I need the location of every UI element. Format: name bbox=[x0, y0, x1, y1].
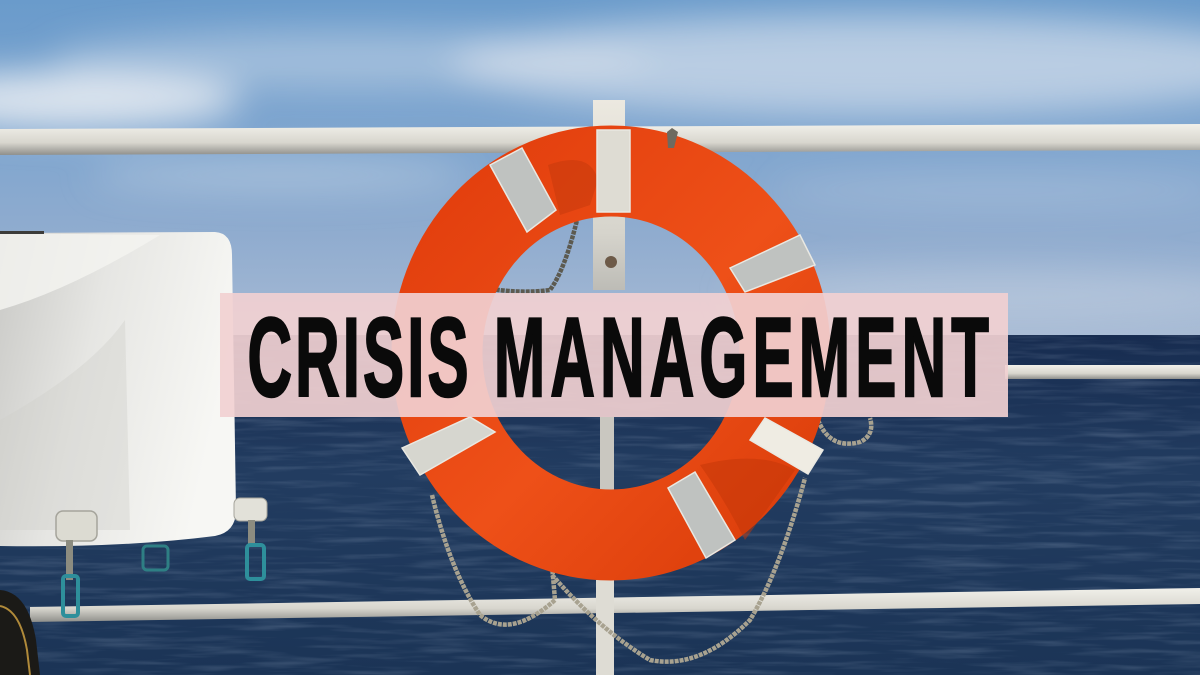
white deck box bbox=[0, 231, 267, 616]
title bbox=[248, 296, 989, 421]
dark bollard bottom left bbox=[0, 590, 40, 675]
ropes bbox=[432, 216, 871, 662]
hooks on box bbox=[56, 498, 267, 616]
middle railing bbox=[1005, 365, 1200, 379]
lower railing bbox=[30, 588, 1200, 622]
sea bbox=[0, 335, 1200, 675]
title: CRISIS bbox=[248, 296, 469, 421]
upper railing bbox=[0, 124, 1200, 155]
title: MANAGEMENT bbox=[494, 296, 989, 421]
title banner bbox=[220, 293, 1008, 421]
reflective strips bbox=[402, 130, 823, 558]
clouds bbox=[0, 15, 1200, 321]
sky background bbox=[0, 0, 1200, 336]
lifebuoy ring bbox=[402, 128, 823, 558]
vertical post bbox=[593, 100, 625, 675]
